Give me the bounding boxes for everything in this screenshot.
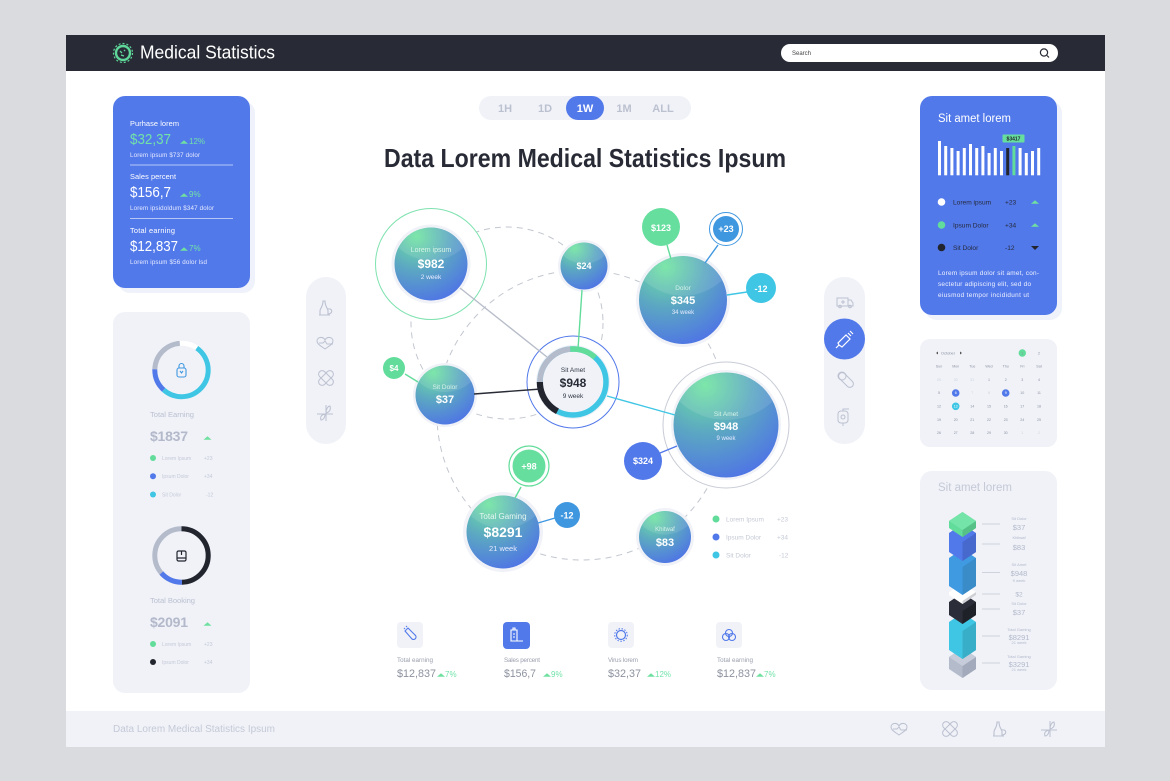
stack labels: $37 — [1013, 523, 1025, 532]
date grid: Sat — [1036, 364, 1042, 368]
centre gauge: sit amet: Sit Amet — [561, 367, 585, 374]
bubble: khitwaf: $83 — [656, 537, 674, 549]
date grid: Tue — [969, 364, 975, 368]
date grid: 7 — [971, 391, 973, 395]
centre gauge: sit amet — [536, 345, 610, 419]
date grid: 3 — [1021, 378, 1023, 382]
stat: purchase: $32,37 — [130, 131, 171, 148]
date grid: 4 — [1038, 378, 1040, 382]
centre gauge: sit amet: $948 — [560, 376, 587, 390]
trend arrow — [204, 436, 212, 440]
legend: Sit Dolor — [953, 245, 979, 252]
date grid: 27 — [954, 431, 958, 435]
date grid: Thu — [1003, 364, 1009, 368]
date grid: 23 — [1004, 418, 1008, 422]
month header: 2 — [1038, 352, 1040, 356]
description: sectetur adipiscing elit, sed do — [938, 281, 1031, 288]
header bar — [66, 35, 1105, 71]
stat: purchase: 12% — [189, 137, 205, 146]
right icon rail — [824, 277, 865, 444]
stat: total earning: 7% — [445, 670, 457, 679]
stack labels: $3291 — [1009, 660, 1029, 669]
date grid: 30 — [954, 378, 958, 382]
date grid — [936, 364, 1042, 435]
bubble: dolor: Dolor — [675, 285, 692, 292]
icon: bell — [993, 722, 1006, 736]
bubble: big sit amet: 9 week — [716, 436, 737, 442]
date grid: 1 — [1021, 431, 1023, 435]
date grid: 8 — [988, 391, 990, 395]
bubble: dolor: $345 — [671, 295, 695, 307]
bubble: sit dolor: $37 — [436, 394, 454, 406]
date grid: 20 — [954, 418, 958, 422]
bubble: lorem ipsum: Lorem ipsum — [411, 247, 451, 254]
legend: total earning: Lorem Ipsum — [162, 456, 191, 462]
date grid: 30 — [1004, 431, 1008, 435]
icon: fan — [1041, 721, 1057, 737]
stat: total earning 2: $12,837 — [717, 668, 756, 680]
donut: total earning — [155, 343, 208, 397]
date grid: 25 — [1037, 418, 1041, 422]
bubble: big sit amet — [671, 370, 781, 480]
date grid: Wed — [985, 364, 993, 368]
stack labels: Khitwaf — [1012, 535, 1026, 540]
badge: -12 — [746, 273, 776, 303]
date grid: 16 — [1004, 404, 1008, 408]
date grid: 6 — [955, 391, 957, 395]
stat: virus lorem: Virus lorem — [608, 657, 638, 664]
stat: total earning: Lorem ipsum $56 dolor lsd — [130, 259, 208, 266]
badge: -12 gaming — [554, 502, 580, 528]
chart legend: +34 — [777, 534, 788, 542]
date grid: 26 — [937, 431, 941, 435]
icon: ambulance — [837, 298, 853, 308]
legend: Lorem ipsum — [953, 199, 992, 206]
badge: $324 — [624, 442, 662, 480]
badge: +23: +23 — [718, 224, 734, 234]
stat: total earning: Total earning — [130, 226, 175, 235]
date grid: 12 — [937, 404, 941, 408]
icon: plaster — [317, 369, 335, 387]
stat: virus lorem — [608, 622, 671, 680]
icon: virus logo — [114, 44, 132, 62]
legend: total earning: +34 — [204, 474, 213, 480]
stack labels: 21 week — [1012, 640, 1026, 645]
stack labels: Sit Dolor — [1011, 601, 1027, 606]
date grid: 17 — [1020, 404, 1024, 408]
tooltip: $3417 — [1007, 136, 1021, 142]
stat: total earning: Total earning — [397, 657, 433, 664]
badge: -12 gaming: -12 — [560, 510, 574, 520]
stack labels: $2 — [1015, 592, 1023, 598]
legend: total earning — [150, 455, 213, 498]
date grid: 28 — [970, 431, 974, 435]
date grid: 9 — [1005, 391, 1007, 395]
stack labels: 9 week — [1013, 578, 1025, 583]
date grid: 29 — [937, 378, 941, 382]
stack labels: Sit Dolor — [1011, 516, 1027, 521]
badge: $4: $4 — [390, 364, 399, 373]
legend: total earning: Ipsum Dolor — [162, 474, 189, 480]
label: total booking: Total Booking — [150, 596, 195, 605]
legend: +34 — [1005, 222, 1017, 229]
stack labels: $948 — [1011, 569, 1027, 578]
badge: $123 — [642, 208, 680, 246]
time range selector — [479, 96, 691, 120]
date grid: 22 — [987, 418, 991, 422]
icon: pills — [837, 371, 855, 389]
centre gauge: sit amet: 9 week — [563, 393, 584, 400]
badge: $4 — [383, 357, 405, 379]
icon: heart — [891, 723, 907, 735]
stat: virus lorem: 12% — [655, 670, 671, 679]
bubble: total gaming: Total Gaming — [479, 512, 527, 521]
bubble: $24: $24 — [576, 261, 592, 271]
stat: purchase: Purhase lorem — [130, 119, 179, 128]
date grid: 14 — [970, 404, 974, 408]
stack labels: Total Gaming — [1007, 654, 1031, 659]
ring: big sit amet — [663, 362, 789, 488]
bubble: total gaming: 21 week — [489, 544, 517, 553]
stat: sales percent: Sales percent — [504, 657, 540, 664]
stack labels: 21 week — [1012, 667, 1026, 672]
chart legend: Sit Dolor — [726, 552, 752, 560]
date grid: 29 — [987, 431, 991, 435]
footer text: Data Lorem Medical Statistics Ipsum — [113, 724, 275, 735]
date grid: Fri — [1020, 364, 1025, 368]
stat: sales — [130, 172, 214, 212]
date grid: 1 — [988, 378, 990, 382]
stat: sales percent: $156,7 — [504, 668, 536, 680]
badge: $324: $324 — [633, 456, 653, 466]
stat: total earning 2: Total earning — [717, 657, 753, 664]
stack labels: $83 — [1013, 543, 1025, 552]
month header — [936, 349, 1040, 357]
bubble: sit dolor — [413, 363, 477, 427]
date grid: 31 — [970, 378, 974, 382]
value: $1837: $1837 — [150, 428, 188, 444]
donut: total booking — [155, 529, 208, 582]
chart legend: -12 — [779, 552, 789, 560]
date grid: 10 — [1020, 391, 1024, 395]
active item: syringe — [824, 318, 865, 360]
bubble: sit dolor: Sit Dolor — [433, 384, 458, 391]
bubble: lorem ipsum: $982 — [418, 257, 445, 271]
stat: total earning: $12,837 — [397, 668, 436, 680]
date grid: 11 — [1037, 391, 1041, 395]
bubble: big sit amet: Sit Amet — [714, 411, 738, 418]
bubble: lorem ipsum — [392, 224, 470, 304]
date grid: 19 — [937, 418, 941, 422]
footer — [66, 711, 1105, 747]
icon: fan — [317, 405, 333, 421]
stack labels — [1007, 516, 1031, 672]
date grid: Mon — [952, 364, 959, 368]
time range selector: 1H — [498, 103, 512, 115]
bubble: total gaming — [463, 492, 543, 572]
legend — [938, 198, 1039, 252]
legend: total earning: Sit Dolor — [162, 492, 182, 498]
stat: total earning 2: 7% — [764, 670, 776, 679]
badge: +98 — [509, 446, 549, 486]
icon: iv bag — [838, 409, 849, 426]
legend: total earning: -12 — [206, 492, 213, 498]
legend: Ipsum Dolor — [953, 222, 989, 229]
time range selector: 1M — [616, 103, 632, 115]
date highlights — [952, 389, 1010, 410]
panel: summary figures — [113, 96, 255, 293]
bubble: total gaming: $8291 — [484, 524, 523, 540]
bubble: dolor: 34 week — [672, 310, 695, 316]
chart legend: Ipsum Dolor — [726, 534, 762, 542]
left icon rail — [306, 277, 346, 444]
stack labels: $8291 — [1009, 633, 1029, 642]
dashed orbit: small — [411, 227, 603, 419]
stat: total earning 2 — [716, 622, 776, 680]
legend: -12 — [1005, 245, 1015, 252]
badge: $123: $123 — [651, 223, 671, 233]
icon: bell — [319, 301, 332, 315]
stat: total earning: 7% — [189, 244, 201, 253]
stat: total earning — [130, 226, 208, 266]
stats row — [397, 622, 776, 680]
time range selector: ALL — [652, 103, 674, 115]
date grid: 13 — [954, 404, 958, 408]
value: $2091: $2091 — [150, 614, 188, 630]
connector lines — [405, 245, 747, 523]
legend: total booking: +34 — [204, 660, 213, 666]
stack labels: $37 — [1013, 608, 1025, 617]
bubble: khitwaf — [636, 508, 694, 566]
legend: total booking: Lorem Ipsum — [162, 642, 191, 648]
icon: booking — [177, 551, 186, 561]
bubble: $24 — [558, 240, 610, 292]
dashed orbit: large — [437, 270, 727, 560]
panel: calendar — [920, 339, 1057, 447]
month header: October — [941, 350, 956, 356]
network chart — [376, 208, 789, 572]
trend arrow — [204, 622, 212, 626]
description: Lorem ipsum dolor sit amet, con- — [938, 270, 1039, 277]
icon: heart — [317, 337, 333, 349]
legend: total booking: +23 — [204, 642, 213, 648]
legend: total booking — [150, 641, 213, 666]
date grid: 5 — [938, 391, 940, 395]
stat: purchase: Lorem ipsum $737 dolor — [130, 152, 200, 159]
bubble: lorem ipsum: 2 week — [421, 274, 442, 281]
search box: Search — [792, 51, 811, 57]
bar chart — [938, 141, 1040, 175]
stat: sales: Lorem ipsidoldum $347 dolor — [130, 205, 214, 212]
legend: total booking: Ipsum Dolor — [162, 660, 189, 666]
stack labels: Total Gaming — [1007, 627, 1031, 632]
month header: 1 — [1021, 352, 1023, 356]
legend: +23 — [1005, 199, 1017, 206]
ring: centre — [527, 336, 619, 428]
leader lines — [982, 524, 1000, 663]
label: total earning: Total Earning — [150, 410, 194, 419]
stat: sales: 9% — [189, 190, 201, 199]
stat: sales: $156,7 — [130, 184, 171, 201]
badge: +23 — [710, 212, 742, 246]
stat: sales: Sales percent — [130, 172, 176, 181]
date grid: 24 — [1020, 418, 1024, 422]
stat: total earning: $12,837 — [130, 238, 178, 255]
heading: Sit amet lorem — [938, 482, 1012, 494]
icon: lock — [177, 364, 186, 377]
stat: sales percent — [503, 622, 563, 680]
badge: -12: -12 — [754, 284, 768, 294]
icon: plaster — [941, 720, 959, 738]
description — [938, 270, 1039, 299]
panel: stacked cubes — [920, 471, 1057, 690]
chart legend: +23 — [777, 516, 788, 524]
heading: Sit amet lorem — [938, 113, 1011, 125]
main title: Data Lorem Medical Statistics Ipsum — [384, 143, 786, 173]
stat: virus lorem: $32,37 — [608, 668, 641, 680]
legend: total earning: +23 — [204, 456, 213, 462]
bubble: big sit amet: $948 — [714, 421, 738, 433]
badge: +98: +98 — [521, 462, 537, 472]
time range selector: 1D — [538, 103, 552, 115]
date grid: 18 — [1037, 404, 1041, 408]
isometric stack — [949, 512, 976, 678]
ring: lorem ipsum — [376, 208, 486, 320]
chart legend — [712, 516, 789, 560]
date grid: 15 — [987, 404, 991, 408]
time range selector: 1W — [577, 103, 594, 115]
stack labels: Sit Amet — [1012, 562, 1027, 567]
tooltip — [1002, 134, 1024, 142]
date grid: 2 — [1005, 378, 1007, 382]
stat: sales percent: 9% — [551, 670, 563, 679]
date grid: Sun — [936, 364, 942, 368]
panel: earning and booking — [113, 312, 250, 693]
bubble: dolor — [636, 253, 730, 347]
description: eiusmod tempor incididunt ut — [938, 292, 1029, 299]
date grid: 2 — [1038, 431, 1040, 435]
chart legend: Lorem Ipsum — [726, 516, 764, 524]
app title: Medical Statistics — [140, 42, 275, 62]
search box — [781, 44, 1058, 62]
date grid: 21 — [970, 418, 974, 422]
stat: total earning — [397, 622, 457, 680]
bubble: khitwaf: Khitwaf — [655, 527, 675, 533]
panel: bar chart card — [920, 96, 1062, 320]
stat: purchase — [130, 119, 205, 159]
